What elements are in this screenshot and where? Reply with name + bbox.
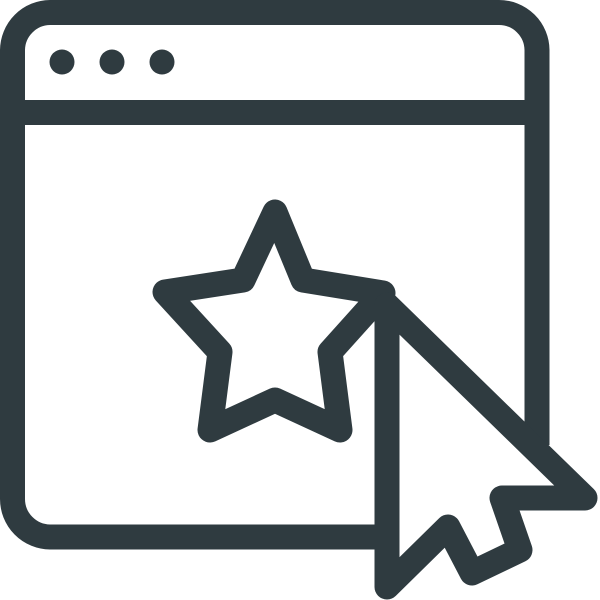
icon: star	[165, 212, 383, 430]
icon: cursor arrow	[387, 305, 585, 587]
window dots	[50, 50, 174, 74]
window frame	[12, 12, 537, 537]
